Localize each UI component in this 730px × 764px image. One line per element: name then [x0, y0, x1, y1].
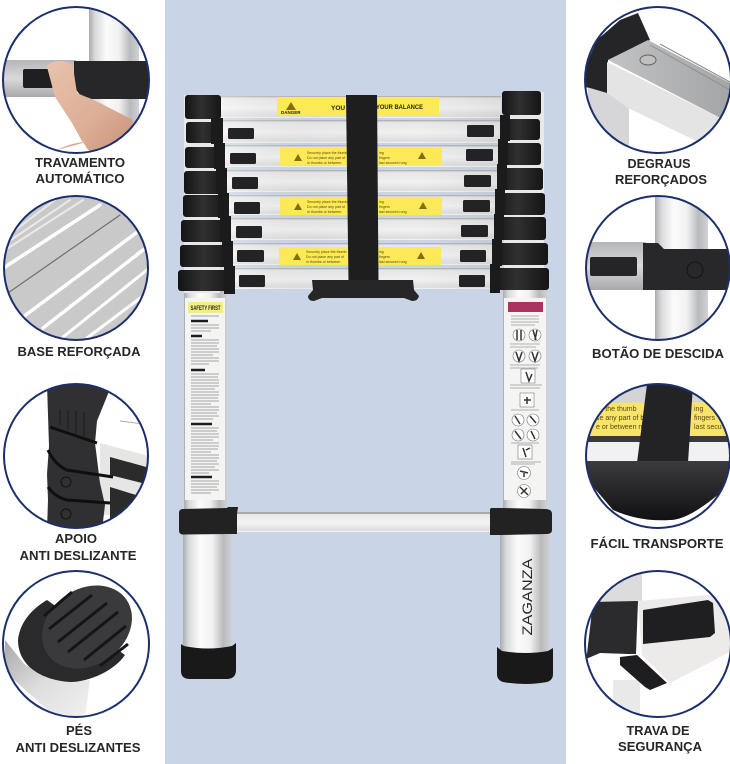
black collar stack: [47, 384, 112, 530]
left foot: [181, 643, 236, 679]
thumb button: [23, 69, 53, 88]
carrying strap: [346, 95, 378, 281]
yellow warning labels: ing: [379, 200, 384, 204]
label: degraus reforçados: REFORÇADOS: [615, 172, 707, 187]
yellow warning labels: Do not place any part of: [307, 156, 345, 160]
feature circle: fácil transporte: last secu: [694, 424, 722, 431]
circle border 2: [4, 196, 148, 340]
folded rungs: [221, 96, 501, 289]
tread grooves: [44, 592, 128, 666]
lower poles: [183, 533, 550, 653]
label: travamento automático: TRAVAMENTO: [35, 155, 125, 170]
label: degraus reforçados: DEGRAUS: [628, 156, 691, 171]
yellow warning labels: fingers: [379, 156, 390, 160]
yellow warning labels: [279, 147, 442, 265]
upper pole: [600, 572, 642, 604]
yellow warning labels: last secured rung: [379, 260, 407, 264]
yellow label: [590, 402, 730, 438]
yellow warning labels: Securely place the thumb: [307, 200, 348, 204]
yellow danger label top: YOU: [331, 105, 345, 112]
bottom crossbar rung: [236, 512, 492, 532]
left collar joints: [211, 118, 235, 294]
button: [643, 600, 715, 644]
feature circle: pés anti deslizantes: [5, 586, 132, 716]
label: botão de descida: BOTÃO DE DESCIDA: [592, 346, 725, 361]
rivet: [640, 55, 656, 65]
feature circle: fácil transporte: [587, 385, 729, 520]
hand: [47, 61, 133, 150]
center background panel: [165, 0, 566, 764]
rung: [584, 242, 646, 290]
feature circle: fácil transporte: se any part of b: [596, 415, 644, 422]
black collar: [584, 601, 638, 659]
foot side: [18, 600, 125, 682]
label: fácil transporte: FÁCIL TRANSPORTE: [590, 536, 724, 551]
lower right clamp: [490, 508, 552, 535]
yellow warning labels: fingers: [379, 255, 390, 259]
feature circle: travamento automático: [4, 9, 148, 151]
yellow warning labels: Securely place the thumb: [307, 151, 348, 155]
yellow warning labels: in thumbs or between: [307, 161, 341, 165]
yellow danger label top: YOUR BALANCE: [376, 104, 424, 111]
yellow warning labels: ing: [379, 151, 384, 155]
yellow warning labels: Do not place any part of: [306, 255, 344, 259]
foot top: [42, 586, 132, 668]
yellow warning labels: last secured rung: [379, 210, 407, 214]
feature circle: degraus reforçados: [586, 13, 730, 146]
tread ridges: [5, 200, 147, 338]
label: pés anti deslizantes: ANTI DESLIZANTES: [16, 740, 141, 755]
circle border 8: [585, 571, 730, 717]
feature circle: fácil transporte: fingers: [694, 415, 716, 422]
lower pole: [613, 680, 640, 714]
label: apoio anti deslizante: ANTI DESLIZANTE: [20, 548, 137, 563]
pole sections showing between collars: [184, 92, 544, 293]
yellow warning labels: in thumbs or between: [307, 210, 341, 214]
right collars stack: [490, 91, 549, 290]
circle border 1: [3, 7, 149, 153]
yellow warning labels: Do not place any part of: [307, 205, 345, 209]
feature circle: trava de segurança: [584, 570, 730, 720]
safety latch: [620, 655, 667, 690]
yellow warning labels: fingers: [379, 205, 390, 209]
rungs: [100, 443, 152, 515]
feature circle: fácil transporte: e or between ru: [596, 424, 645, 431]
dark rung edge: [584, 436, 730, 442]
circle border 5: [585, 7, 730, 153]
upper poles: [184, 288, 547, 510]
rung body: [638, 593, 730, 683]
horizontal rung: [0, 60, 76, 97]
rung thumb buttons: [228, 125, 494, 287]
feature circle: fácil transporte: ing: [694, 406, 703, 413]
black clamp: [74, 61, 152, 99]
feature circle: fácil transporte: ce the thumb: [596, 406, 637, 413]
left safety label: [185, 298, 225, 500]
handle: [584, 461, 730, 520]
feature circle: apoio anti deslizante: [46, 385, 147, 527]
ladder product illustration: [178, 91, 553, 684]
pole: [655, 194, 708, 342]
circle border 7: [586, 384, 730, 528]
yellow danger label top: [277, 97, 439, 115]
right collar joints: [490, 115, 510, 293]
collar gaps: [48, 427, 113, 503]
left safety label: SAFETY FIRST: [190, 306, 221, 312]
yellow danger label top: DANGER: [281, 110, 301, 115]
lower left clamp: [179, 507, 238, 534]
black clamp: [643, 243, 730, 290]
left collars stack: [178, 95, 233, 291]
front face: [607, 62, 720, 141]
yellow warning labels: Securely place the thumb: [306, 250, 347, 254]
circle border 3: [4, 384, 148, 528]
label: trava de segurança: SEGURANÇA: [618, 739, 703, 754]
circle border 6: [586, 196, 730, 340]
descend button: [590, 257, 637, 276]
label: trava de segurança: TRAVA DE: [626, 723, 690, 738]
feature circle: base reforçada: [5, 197, 147, 339]
black strap: [637, 384, 693, 463]
label: pés anti deslizantes: PÉS: [66, 723, 92, 738]
black cap: [584, 13, 650, 93]
aluminium pole: [89, 5, 139, 155]
label: apoio anti deslizante: APOIO: [55, 531, 97, 546]
circle border 4: [3, 571, 149, 717]
feature circle: botão de descida: [584, 194, 730, 342]
label: base reforçada: BASE REFORÇADA: [18, 344, 141, 359]
silver tube: [5, 640, 90, 718]
label: travamento automático: AUTOMÁTICO: [36, 171, 124, 186]
right foot: [497, 647, 553, 684]
pole: [588, 88, 629, 152]
yellow warning labels: last secured rung: [379, 161, 407, 165]
right safety pictogram label: [504, 298, 546, 500]
carrying handle: [308, 280, 419, 301]
yellow warning labels: ing: [379, 250, 384, 254]
top face: [608, 40, 730, 124]
yellow warning labels: in thumbs or between: [306, 260, 340, 264]
brand name: ZAGANZA: [519, 558, 535, 636]
